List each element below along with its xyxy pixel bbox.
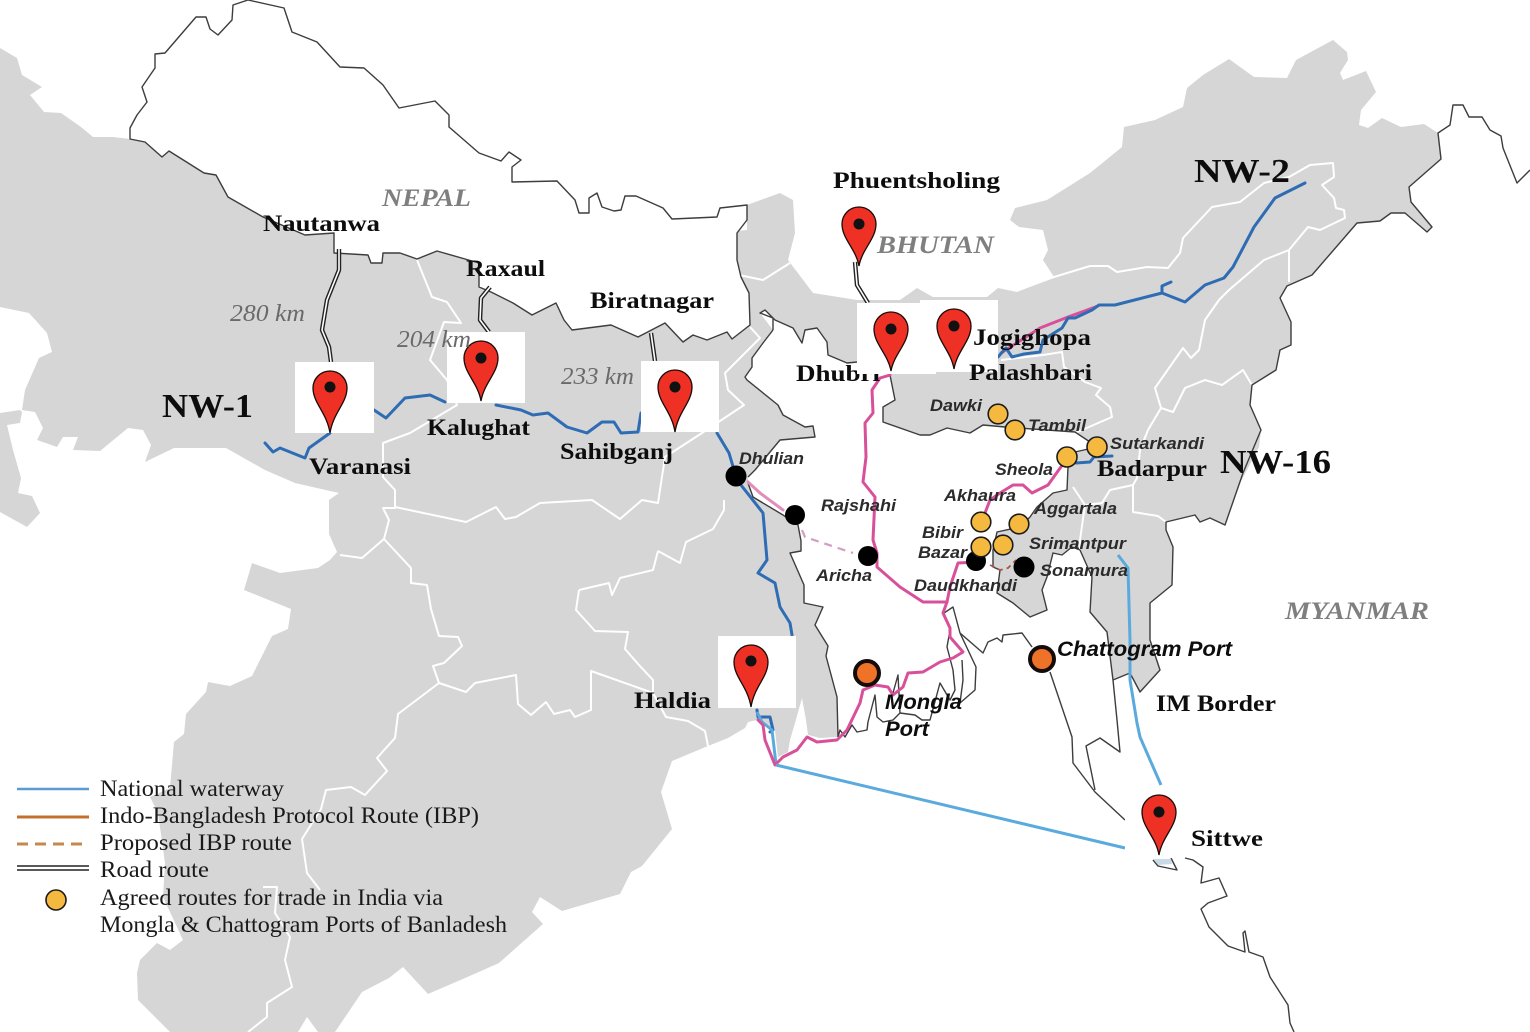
national waterway: NW-2 [998,282,1171,357]
yellow agreed route markers [971,404,1107,557]
route point labels: Aggartala [1033,499,1117,518]
place labels: Jogighopa [973,325,1092,350]
place labels: Phuentsholing [833,168,1001,193]
route point labels: Dhulian [739,449,804,468]
national waterway: NW-1 [265,395,792,764]
place labels: Nautanwa [263,211,381,236]
route point labels: Aricha [815,566,872,585]
state boundaries [248,163,1345,1032]
icon: pin Dhubri [874,312,908,371]
country borders and coastline [745,105,1530,1032]
Dhubri label: Dhubri [796,361,881,386]
distance labels: 233 km [561,364,634,390]
legend: Road route [100,857,209,882]
route point labels: Bibir [922,523,964,542]
icon: pin Kalughat [464,341,498,401]
route point labels: Bazar [918,543,968,562]
black junction markers [726,466,1034,578]
port labels: Mongla [885,690,962,714]
legend [17,776,508,937]
country labels: BHUTAN [876,232,995,259]
icon: pin Varanasi [313,371,347,433]
map: Nepal [130,0,750,342]
route point labels: Rajshahi [821,496,897,515]
waterway labels: NW-1 [162,388,253,425]
national waterway: NW-16 [1076,456,1112,463]
distance labels [230,301,634,390]
legend: Agreed routes for trade in India via [100,885,443,910]
port labels: Chattogram Port [1057,637,1233,661]
road routes [322,249,868,362]
Indo-Bangladesh Protocol routes [748,306,1098,765]
orange port markers [855,647,1054,685]
waterway labels [162,153,1331,481]
place labels: Haldia [634,688,712,713]
country labels: NEPAL [381,185,471,212]
country labels [381,185,1429,625]
white pin backgrounds [295,300,1185,858]
icon: pin Haldia [734,645,768,707]
icon: pin Palashbari [937,309,971,369]
place labels: Badarpur [1097,456,1207,481]
national waterway: sea route to Sittwe [776,555,1161,848]
pale water patch under Sittwe pin [1153,859,1172,865]
place labels: Sittwe [1191,826,1263,851]
route point labels: Dawki [930,396,983,415]
port labels: Port [885,717,930,741]
legend: Indo-Bangladesh Protocol Route (IBP) [100,803,479,828]
icon: pin Sahibganj [658,370,692,432]
icon: pin Phuentsholing [842,207,876,266]
route point labels: Akhaura [943,486,1016,505]
national waterway: NW-2 upper reach [1162,183,1305,302]
place labels: IM Border [1156,691,1276,716]
place labels: Kalughat [427,415,530,440]
distance labels: 204 km [397,327,471,353]
route point labels [739,396,1205,595]
distance labels: 280 km [230,301,305,327]
icon: pin Sittwe [1142,795,1176,855]
place labels: Raxaul [466,256,545,281]
route point labels: Tambil [1028,416,1087,435]
place labels: Biratnagar [590,288,714,313]
legend: Mongla & Chattogram Ports of Banladesh [100,912,508,937]
route point labels: Daudkhandi [914,576,1018,595]
legend: National waterway [100,776,285,801]
place labels: Varanasi [309,454,412,479]
route point labels: Sutarkandi [1110,434,1205,453]
legend: Proposed IBP route [100,830,292,855]
country labels: MYANMAR [1284,598,1429,625]
map: Bangladesh [745,310,1120,800]
place labels: Sahibganj [560,439,673,464]
place labels [263,168,1276,851]
route point labels: Srimantpur [1029,534,1127,553]
waterway labels: NW-2 [1194,153,1290,190]
route point labels: Sonamura [1040,561,1128,580]
route point labels: Sheola [995,460,1053,479]
waterway labels: NW-16 [1220,444,1331,481]
proposed IBP routes [802,530,1016,570]
place labels: Palashbari [969,360,1093,385]
port labels [885,637,1233,741]
